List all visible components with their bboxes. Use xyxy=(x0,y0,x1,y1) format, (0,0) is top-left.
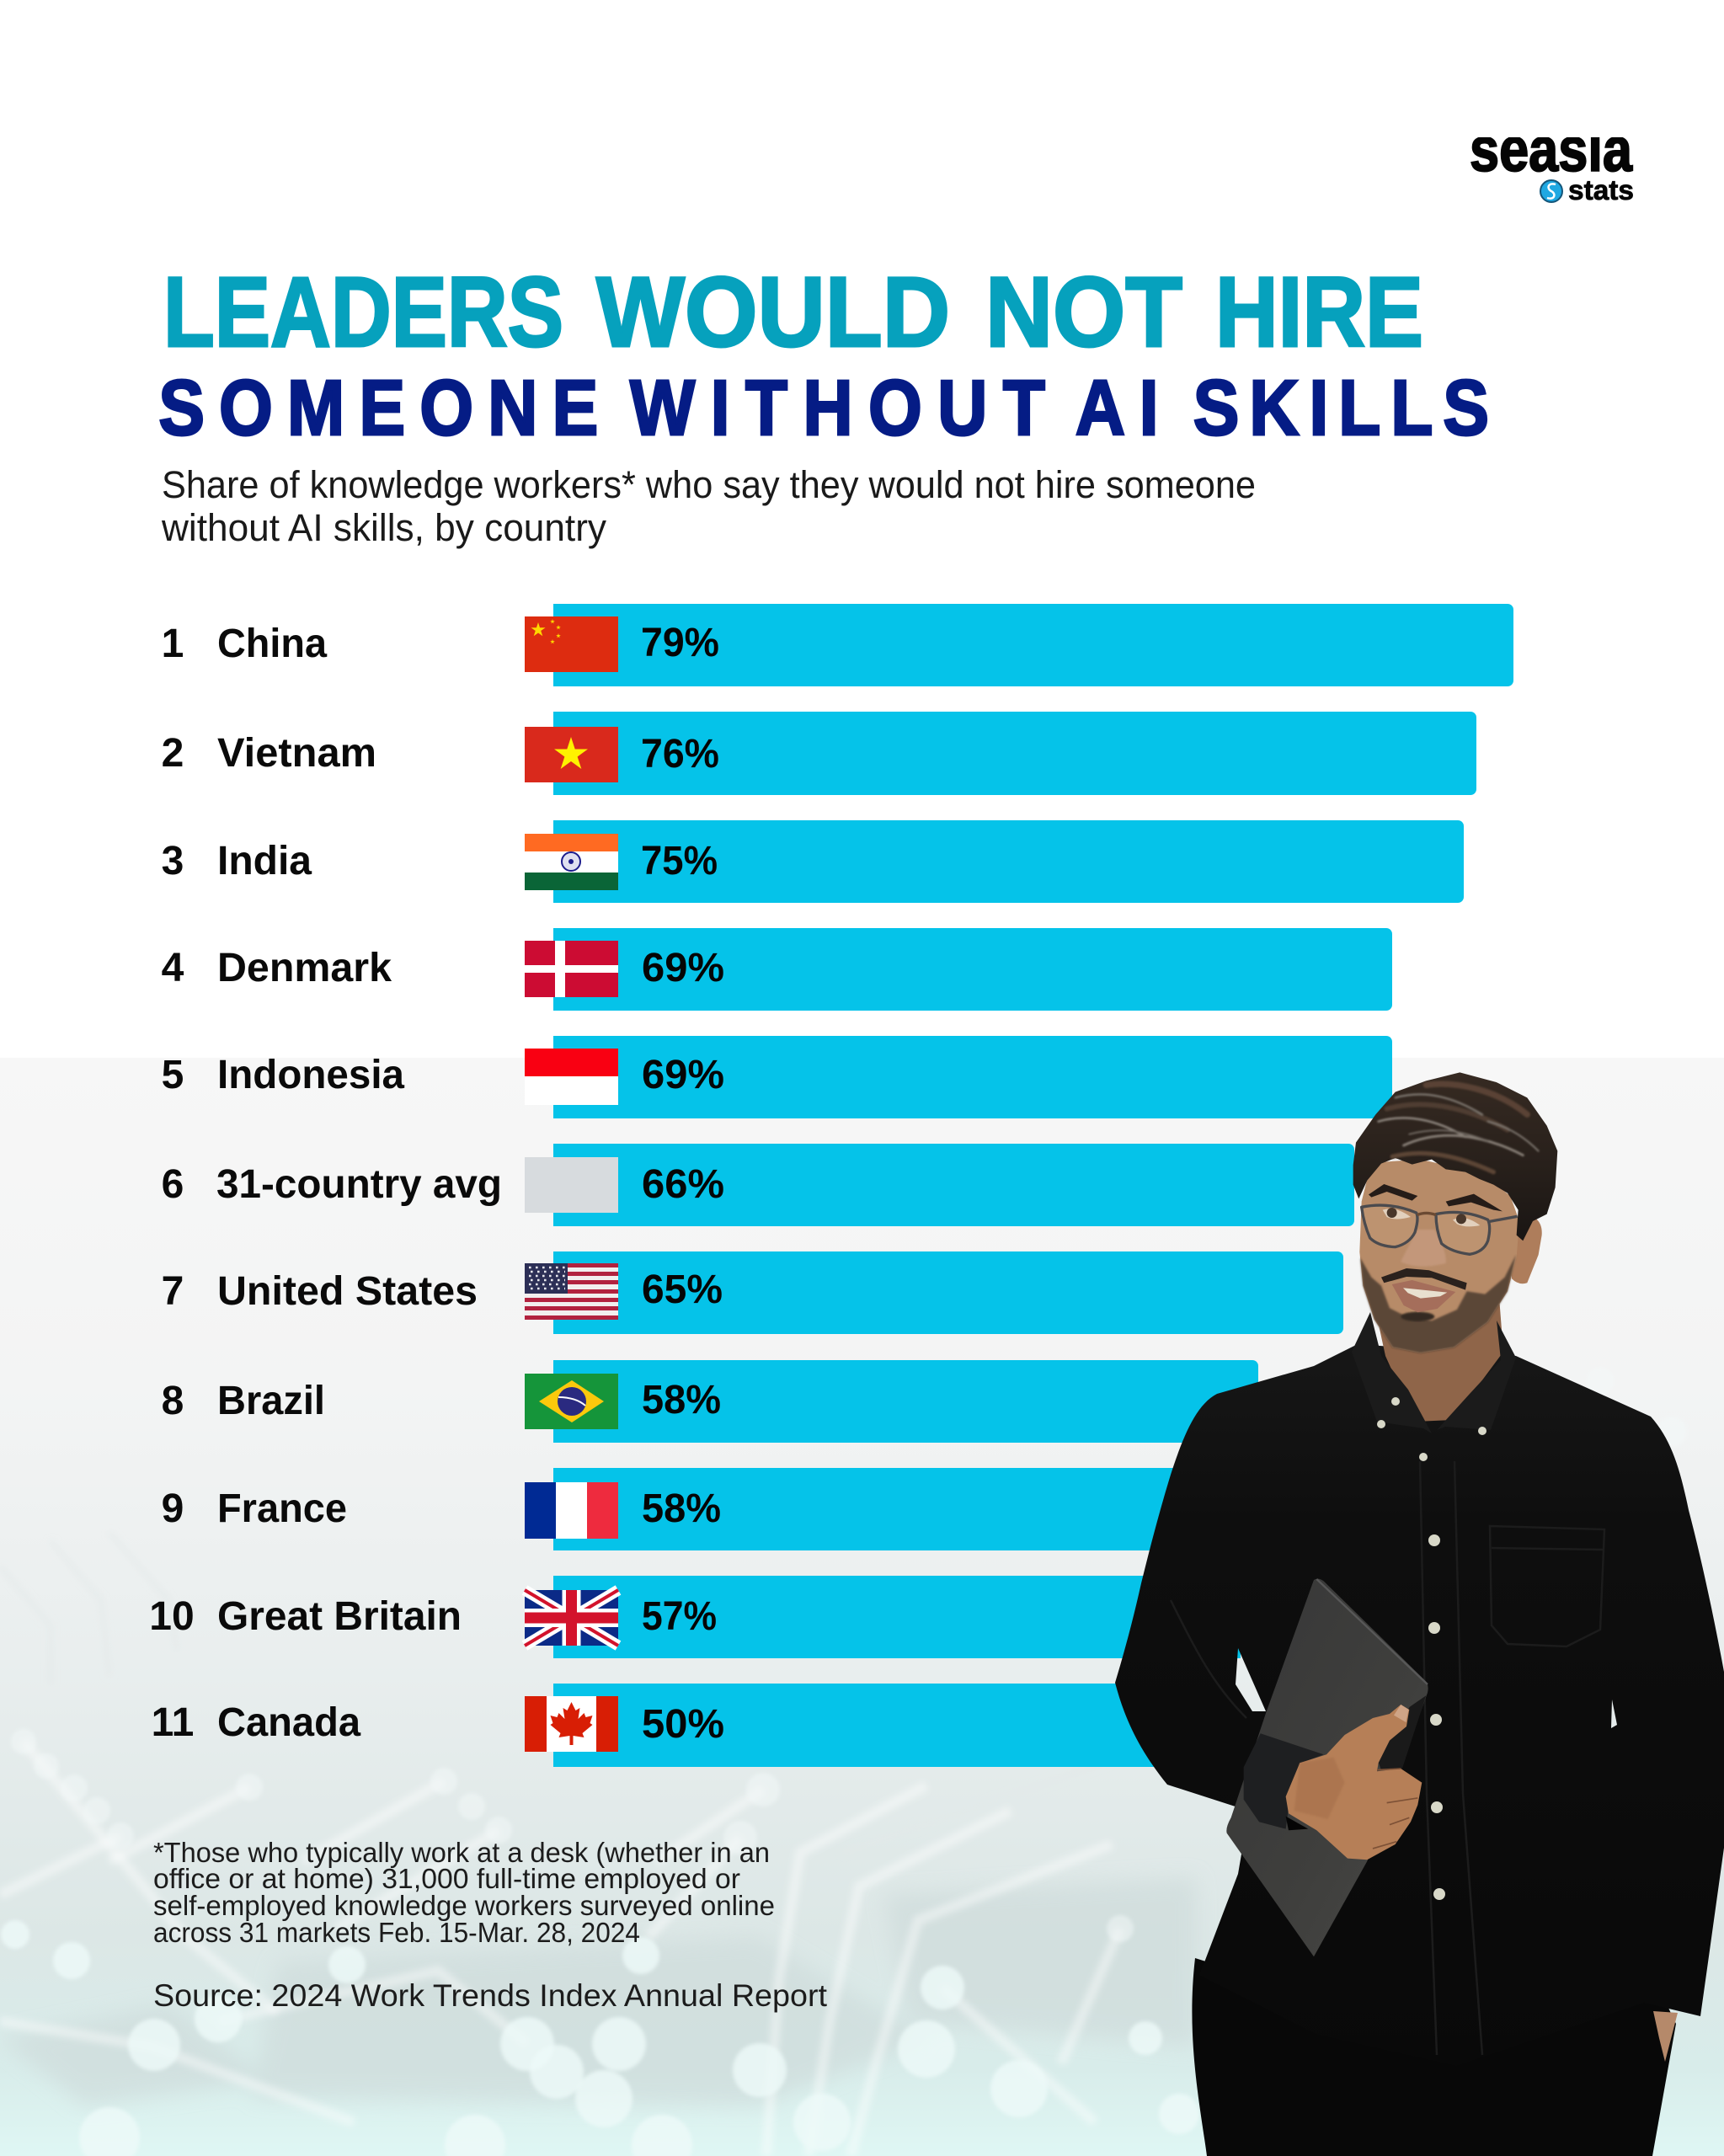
footnote xyxy=(153,1837,775,1948)
row 5: Indonesia xyxy=(162,1053,724,1097)
row 8: Brazil: 8 xyxy=(162,1379,184,1423)
row 5: Indonesia: 69% xyxy=(642,1053,724,1097)
row 11: Canada: 11 xyxy=(152,1700,194,1745)
nose xyxy=(1401,1230,1446,1267)
row 7: United States: United States xyxy=(217,1269,478,1314)
footnote: across 31 markets Feb. 15-Mar. 28, 2024 xyxy=(153,1917,640,1948)
footnote: *Those who typically work at a desk (whether in an xyxy=(153,1837,770,1868)
title line 1: NOT xyxy=(985,257,1182,368)
eyebrows xyxy=(1369,1184,1417,1201)
row 4: Denmark: 69% xyxy=(642,946,724,990)
row 9: France: France xyxy=(217,1486,347,1531)
logo: seasia stats: stats xyxy=(1568,174,1634,205)
soul patch xyxy=(1401,1312,1434,1321)
title line 2: WITHOUT xyxy=(630,364,1045,451)
footnote: office or at home) 31,000 full-time employed or xyxy=(153,1863,740,1894)
hair xyxy=(1353,1072,1557,1241)
row 2: Vietnam xyxy=(162,731,719,776)
row 2: Vietnam: Vietnam xyxy=(217,731,376,776)
row 6: 31-country avg xyxy=(162,1162,724,1207)
subtitle: without AI skills, by country xyxy=(161,506,606,549)
row 9: France: 9 xyxy=(162,1486,184,1531)
row 4: Denmark xyxy=(162,946,724,990)
eyes xyxy=(1383,1209,1411,1219)
flag: United States xyxy=(525,1263,618,1320)
row 8: Brazil: 58% xyxy=(642,1378,721,1422)
row 8: Brazil: Brazil xyxy=(217,1379,325,1423)
row 9: France xyxy=(162,1486,721,1531)
row 1: China: 79% xyxy=(641,621,719,665)
bar chart xyxy=(553,604,1513,1767)
flag: Great Britain xyxy=(525,1590,618,1646)
row 11: Canada: 50% xyxy=(642,1702,724,1747)
head xyxy=(1353,1072,1557,1353)
row 4: Denmark: Denmark xyxy=(217,946,392,990)
row 10: Great Britain: 10 xyxy=(149,1594,195,1639)
row 3: India: 75% xyxy=(641,839,718,883)
flag: Denmark xyxy=(525,941,618,997)
shirt details xyxy=(1171,1461,1604,2055)
title line 2: SKILLS xyxy=(1193,364,1489,451)
row 2: Vietnam: 76% xyxy=(641,732,719,776)
shirt buttons xyxy=(1377,1397,1486,1900)
beard xyxy=(1360,1255,1516,1353)
neck xyxy=(1374,1297,1503,1422)
source: Source: 2024 Work Trends Index Annual Report xyxy=(153,1978,828,2013)
flag: India xyxy=(525,834,618,890)
row 10: Great Britain: Great Britain xyxy=(217,1594,462,1639)
flag: Indonesia xyxy=(525,1049,618,1105)
title line 1: LEADERS xyxy=(163,257,563,368)
circuit board background xyxy=(0,1058,1724,2156)
footnote: self-employed knowledge workers surveyed online xyxy=(153,1890,775,1921)
title line 2 xyxy=(158,364,1489,451)
row 3: India: India xyxy=(217,839,312,883)
row 10: Great Britain: 57% xyxy=(642,1594,717,1639)
person holding a tablet xyxy=(1115,1072,1724,2156)
cuff and hand xyxy=(1244,1705,1422,1860)
row 7: United States xyxy=(162,1267,723,1314)
row 3: India: 3 xyxy=(162,839,184,883)
row 8: Brazil xyxy=(162,1378,721,1423)
glasses xyxy=(1362,1205,1518,1254)
hair highlights xyxy=(1379,1084,1539,1172)
subtitle xyxy=(161,463,1256,549)
title line 1: WOULD xyxy=(596,257,950,368)
hand in pocket xyxy=(1653,2011,1678,2062)
row 7: United States: 7 xyxy=(162,1269,184,1314)
row 4: Denmark: 4 xyxy=(162,946,184,990)
row 7: United States: 65% xyxy=(642,1267,723,1312)
row 6: 31-country avg: 66% xyxy=(642,1162,724,1207)
face xyxy=(1359,1160,1519,1353)
teeth xyxy=(1403,1288,1447,1299)
row 6: 31-country avg: 31-country avg xyxy=(216,1162,502,1207)
flag: grey placeholder xyxy=(525,1157,618,1213)
logo: seasia stats xyxy=(1465,114,1638,205)
row 9: France: 58% xyxy=(642,1486,721,1531)
flag: Vietnam xyxy=(525,727,618,782)
row 1: China: China xyxy=(217,622,327,666)
title line 1 xyxy=(163,257,1423,368)
row 2: Vietnam: 2 xyxy=(162,731,184,776)
row 3: India xyxy=(162,839,718,883)
title line 2: SOMEONE xyxy=(158,364,598,451)
lips xyxy=(1392,1280,1455,1312)
moustache xyxy=(1381,1268,1467,1290)
row 1: China: 1 xyxy=(162,622,184,666)
shirt xyxy=(1115,1344,1724,2066)
row 11: Canada: Canada xyxy=(217,1700,360,1745)
title line 2: AI xyxy=(1075,364,1158,451)
flag: France xyxy=(525,1482,618,1539)
logo: seasia stats: seasia xyxy=(1470,115,1633,184)
row 5: Indonesia: 5 xyxy=(162,1053,184,1097)
title line 1: HIRE xyxy=(1215,257,1423,368)
flag: China xyxy=(525,616,618,672)
tablet xyxy=(1226,1579,1428,1956)
row 10: Great Britain xyxy=(149,1594,717,1639)
row 6: 31-country avg: 6 xyxy=(162,1162,184,1207)
subtitle: Share of knowledge workers* who say they would not hire someone xyxy=(162,463,1256,506)
flag: Canada xyxy=(525,1696,618,1752)
row 11: Canada xyxy=(152,1700,724,1747)
collar xyxy=(1352,1312,1516,1433)
row 5: Indonesia: Indonesia xyxy=(217,1053,404,1097)
flag: Brazil xyxy=(525,1374,618,1429)
row 1: China xyxy=(162,621,719,666)
trousers xyxy=(1192,1958,1676,2156)
ear xyxy=(1510,1219,1542,1283)
